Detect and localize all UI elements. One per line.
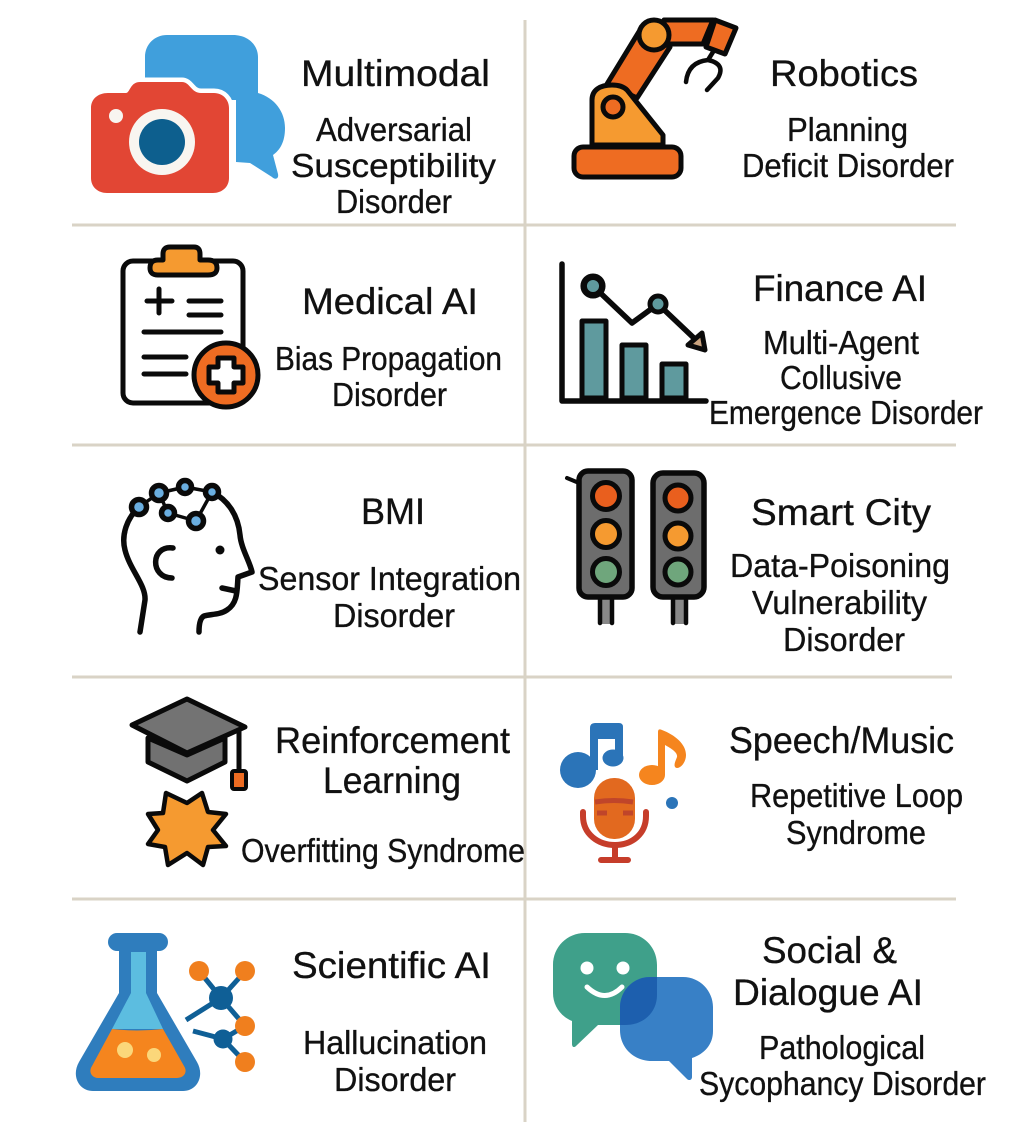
- text: Pathological Sycophancy Disorder: Pathological: [759, 1029, 925, 1066]
- heading: Reinforcement Learning: Learning: [323, 760, 461, 801]
- heading: Social & Dialogue AI: Dialogue AI: [733, 972, 923, 1013]
- text: Pathological Sycophancy Disorder: Sycophancy Disorder: [699, 1065, 986, 1102]
- panel: Smart City: [567, 471, 950, 658]
- panel: Robotics: [574, 20, 954, 184]
- text: Hallucination Disorder: [303, 1024, 487, 1098]
- text: Data-Poisoning Vulnerability Disorder: Data-Poisoning: [730, 547, 950, 584]
- text: Bias Propagation Disorder: Disorder: [332, 376, 447, 413]
- text: Bias Propagation Disorder: [275, 340, 502, 413]
- panel: Multimodal: [91, 35, 497, 220]
- text: Overfitting Syndrome: Overfitting Syndrome: [241, 832, 525, 869]
- panel: Reinforcement Learning: [132, 699, 525, 869]
- heading: Smart City: Smart City: [751, 492, 932, 533]
- text: Pathological Sycophancy Disorder: [699, 1029, 986, 1102]
- text: Multi-Agent Collusive Emergence Disorder: Collusive: [780, 359, 902, 396]
- text: Repetitive Loop Syndrome: Syndrome: [786, 814, 926, 851]
- icon: music notes and microphone: [560, 723, 686, 860]
- heading: BMI: BMI: [361, 491, 425, 532]
- icon: traffic lights: [567, 471, 704, 624]
- heading: Social & Dialogue AI: Social &: [762, 930, 897, 971]
- panel: Scientific AI: [76, 933, 491, 1098]
- text: Adversarial Susceptibility Disorder: [291, 111, 497, 220]
- text: Multi-Agent Collusive Emergence Disorder: Emergence Disorder: [709, 394, 983, 431]
- heading: Social & Dialogue AI: [733, 930, 923, 1013]
- icon: robot arm: [574, 20, 736, 177]
- heading: Scientific AI: Scientific AI: [292, 945, 491, 986]
- text: Hallucination Disorder: Disorder: [334, 1061, 456, 1098]
- icon: falling bar chart: [562, 264, 706, 401]
- heading: Medical AI: Medical AI: [302, 281, 478, 322]
- text: Sensor Integration Disorder: Sensor Integration: [258, 560, 521, 597]
- text: Sensor Integration Disorder: Disorder: [333, 597, 455, 634]
- heading: Speech/Music: Speech/Music: [729, 720, 954, 761]
- text: Multi-Agent Collusive Emergence Disorder: Multi-Agent: [763, 324, 919, 361]
- heading: Robotics: Robotics: [770, 53, 918, 94]
- text: Multi-Agent Collusive Emergence Disorder: [709, 324, 983, 431]
- text: Sensor Integration Disorder: [258, 560, 521, 634]
- text: Data-Poisoning Vulnerability Disorder: [730, 547, 950, 658]
- panel: Medical AI: [123, 247, 502, 413]
- icon: graduation cap and burst: [132, 699, 246, 865]
- icon: overlapping chat bubbles: [553, 933, 713, 1080]
- panel: Social & Dialogue AI: [553, 930, 986, 1102]
- icon: flask and molecule: [76, 933, 255, 1091]
- text: Adversarial Susceptibility Disorder: Susceptibility: [291, 147, 497, 184]
- icon: head with neural nodes: [124, 480, 252, 632]
- icon: clipboard with medical cross: [123, 247, 258, 407]
- heading: Reinforcement Learning: Reinforcement: [275, 720, 511, 761]
- text: Data-Poisoning Vulnerability Disorder: Vulnerability: [752, 584, 927, 621]
- text: Hallucination Disorder: Hallucination: [303, 1024, 487, 1061]
- text: Adversarial Susceptibility Disorder: Disorder: [336, 183, 452, 220]
- panel: BMI: [124, 480, 521, 634]
- text: Planning Deficit Disorder: Deficit Disorder: [742, 147, 954, 184]
- text: Adversarial Susceptibility Disorder: Adversarial: [316, 111, 472, 148]
- heading: Multimodal: Multimodal: [301, 53, 490, 94]
- heading: Finance AI: Finance AI: [753, 268, 927, 309]
- text: Repetitive Loop Syndrome: [750, 777, 963, 851]
- text: Planning Deficit Disorder: [742, 111, 954, 184]
- text: Data-Poisoning Vulnerability Disorder: Disorder: [783, 621, 905, 658]
- panel: Speech/Music: [560, 720, 963, 860]
- text: Repetitive Loop Syndrome: Repetitive Loop: [750, 777, 963, 814]
- heading: Reinforcement Learning: [275, 720, 511, 801]
- text: Planning Deficit Disorder: Planning: [787, 111, 908, 148]
- panel: Finance AI: [562, 264, 983, 431]
- text: Bias Propagation Disorder: Bias Propagation: [275, 340, 502, 377]
- icon: camera and speech bubble: [91, 35, 285, 193]
